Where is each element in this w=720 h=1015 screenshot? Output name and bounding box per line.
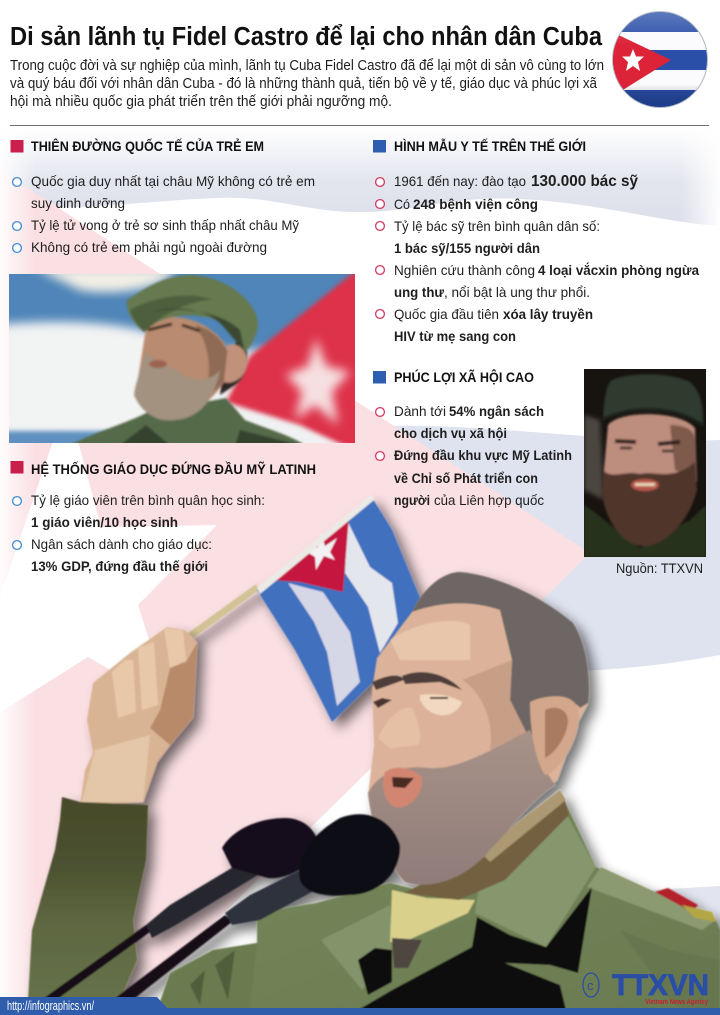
bullet list: health: Có: [394, 196, 410, 212]
divider line: [10, 125, 709, 126]
bullet list: health: 130.000 bác sỹ: [531, 173, 638, 190]
flag cloth: [257, 495, 420, 722]
icon: blue square: [373, 140, 386, 152]
bullet list: welfare: về Chỉ số Phát triển con: [394, 470, 538, 486]
raised fist: [80, 627, 197, 805]
panel: social welfare: [373, 368, 572, 508]
bullet list: education: Ngân sách dành cho giáo dục:: [31, 536, 212, 552]
bullet list: welfare: người: [394, 492, 430, 508]
bullet list: children: [13, 173, 315, 255]
heading: education: HỆ THỐNG GIÁO DỤC ĐỨNG ĐẦU MỸ LATINH: [31, 460, 316, 477]
bullet list: health: Nghiên cứu thành công: [394, 262, 535, 278]
bullet list: education: 1 giáo viên/10 học sinh: [31, 514, 178, 530]
jacket: [157, 800, 720, 1010]
bullet list: welfare: Dành tới: [394, 403, 446, 419]
icon: red square: [10, 461, 24, 474]
sleeve: [28, 797, 148, 1000]
bullet list: welfare: cho dịch vụ xã hội: [394, 425, 507, 441]
epaulette: [587, 867, 716, 930]
heading: health: HÌNH MẪU Y TẾ TRÊN THẾ GIỚI: [394, 137, 586, 154]
bullet list: health: [376, 173, 699, 344]
bullet list: health: Tỷ lệ bác sỹ trên bình quân dân số:: [394, 218, 600, 234]
bullet list: welfare: của Liên hợp quốc: [434, 492, 544, 508]
logo: TTXVN: TTXVN: [612, 969, 709, 1002]
bullet list: health: Quốc gia đầu tiên: [394, 306, 499, 322]
bullet list: children: Tỷ lệ tử vong ở trẻ sơ sinh thấp nhất châu Mỹ: [31, 217, 299, 233]
bullet list: health: 1961 đến nay: đào tạo: [394, 173, 526, 189]
photo: Castro in green cap in front of flag: [9, 274, 355, 443]
photo: Castro portrait on dark background: [584, 369, 706, 557]
bullet list: welfare: [376, 403, 572, 508]
bullet list: health: , nổi bật là ung thư phổi.: [444, 284, 590, 300]
left collar: [321, 905, 392, 990]
intro text: hội mà nhiều quốc gia phát triển trên thế giới phải ngưỡng mộ.: [10, 94, 392, 110]
logo: TTXVN: c: [587, 978, 594, 993]
bullet list: education: 13% GDP, đứng đầu thế giới: [31, 558, 208, 574]
intro text: [10, 58, 604, 110]
neck collar and beard: [404, 790, 569, 900]
bullet list: education: Tỷ lệ giáo viên trên bình quân học sinh:: [31, 492, 265, 508]
bullet list: health: HIV từ mẹ sang con: [394, 328, 516, 344]
icon: red square: [10, 140, 24, 152]
logo: TTXVN: Vietnam News Agency: [645, 999, 708, 1006]
intro text: và quý báu đối với nhân dân Cuba - đó là những thành quả, tiến bộ về y tế, giáo dục và phúc lợi xã: [10, 76, 598, 92]
bullet list: children: Quốc gia duy nhất tại châu Mỹ không có trẻ em: [31, 173, 315, 189]
epaulette badge: [655, 888, 716, 922]
bullet list: education: [13, 492, 265, 574]
panel: children's paradise: [10, 137, 315, 255]
bullet list: health: xóa lây truyền: [503, 306, 593, 322]
bullet list: children: Không có trẻ em phải ngủ ngoài đường: [31, 239, 267, 255]
microphones: [30, 814, 400, 1008]
collar: [475, 810, 596, 947]
bullet list: welfare: 54% ngân sách: [449, 403, 544, 419]
head: [368, 572, 589, 885]
heading: children: THIÊN ĐƯỜNG QUỐC TẾ CỦA TRẺ EM: [31, 137, 264, 154]
undershirt: [390, 890, 475, 942]
title: Di sản lãnh tụ Fidel Castro để lại cho nhân dân Cuba: [10, 23, 603, 51]
footer url: http://infographics.vn/: [7, 999, 94, 1013]
dark shadows: [358, 887, 592, 1010]
bullet list: health: ung thư: [394, 284, 445, 300]
bullet list: health: 248 bệnh viện công: [413, 196, 538, 212]
cuban flag held in hand: [184, 495, 420, 722]
flag pole: [184, 584, 259, 642]
intro text: Trong cuộc đời và sự nghiệp của mình, lãnh tụ Cuba Fidel Castro đã để lại một di sản vô cùng to lớn: [10, 58, 604, 74]
bullet list: children: suy dinh dưỡng: [31, 195, 125, 211]
footer bar: [0, 997, 720, 1015]
icon: Cuban flag ball: [610, 11, 708, 109]
bullet list: health: 4 loại vắcxin phòng ngừa: [538, 261, 699, 278]
heading: welfare: PHÚC LỢI XÃ HỘI CAO: [394, 368, 534, 385]
logo: TTXVN: [583, 969, 709, 1006]
bullet list: welfare: Đứng đầu khu vực Mỹ Latinh: [394, 447, 572, 463]
panel: education: [10, 460, 316, 574]
panel: health model: [373, 137, 699, 344]
photo caption: Nguồn: TTXVN: [616, 561, 703, 576]
icon: blue square: [373, 371, 386, 384]
main photo: Castro speaking: [28, 572, 720, 1010]
bullet list: health: 1 bác sỹ/155 người dân: [394, 240, 540, 256]
